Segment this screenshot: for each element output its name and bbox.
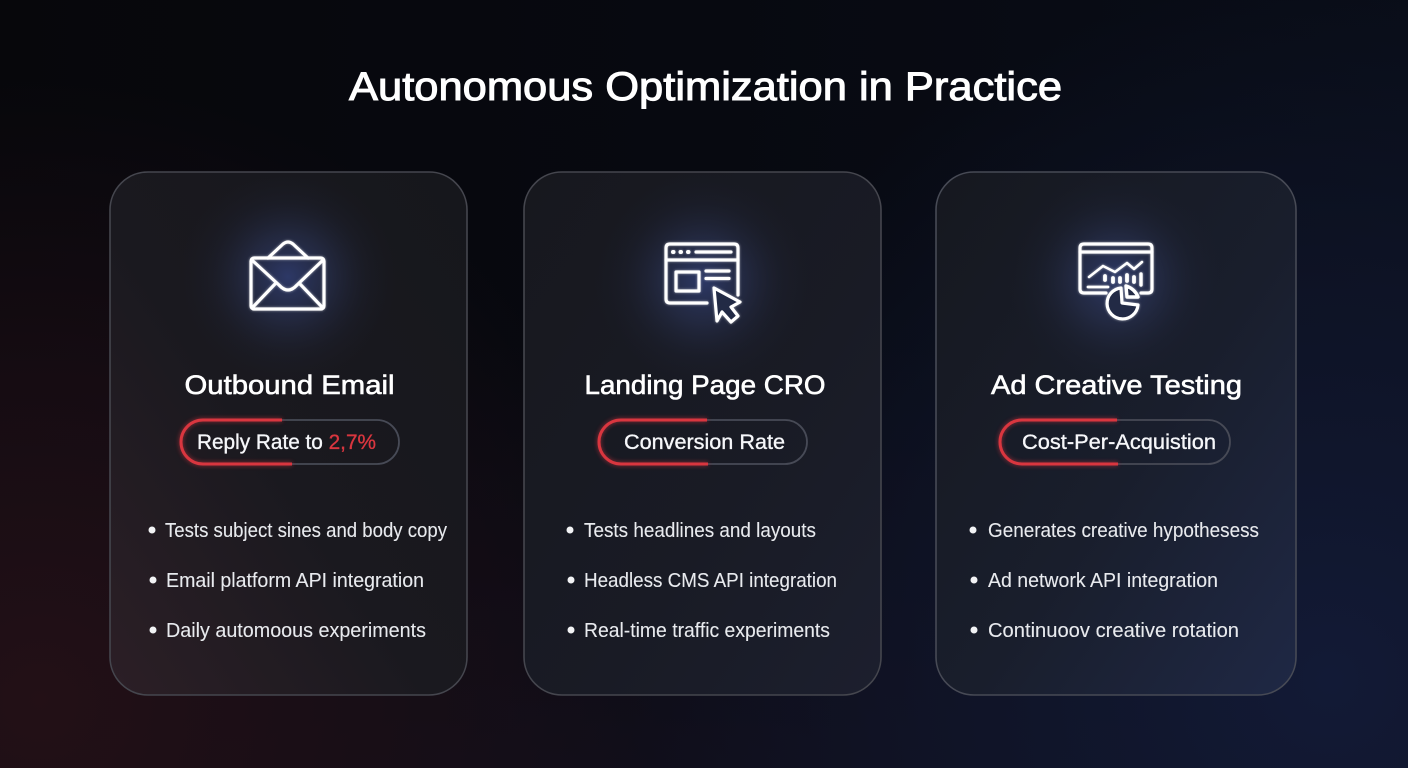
panel: ad creative testing (936, 172, 1296, 695)
metric pill: cost-per-acquistion: Cost-Per-Acquistion (1022, 430, 1216, 454)
panel: landing page cro (524, 172, 881, 695)
bullet list: ad creative testing: Continuoov creative rotation (988, 620, 1239, 642)
metric pill: reply rate (181, 420, 399, 464)
bullet list: outbound email (148, 520, 447, 642)
icon: analytics dashboard with pie chart (1008, 172, 1224, 388)
bullet list: landing page cro (566, 520, 837, 642)
bullet list: landing page cro: Real-time traffic experiments (584, 620, 830, 642)
icon: envelope (180, 169, 396, 385)
panel: outbound email (110, 169, 467, 695)
heading: outbound email: Outbound Email (184, 370, 394, 400)
bullet list: outbound email: Daily automoous experiments (166, 620, 426, 642)
heading: landing page cro: Landing Page CRO (584, 370, 826, 400)
metric pill: reply rate: Reply Rate to 2,7% (197, 430, 376, 454)
bullet list: ad creative testing: Ad network API integration (988, 570, 1218, 592)
metric pill: conversion rate (599, 420, 807, 464)
bullet list: landing page cro: Headless CMS API integration (584, 570, 837, 592)
metric pill: conversion rate: Conversion Rate (624, 430, 785, 454)
icon: browser with cursor (595, 172, 811, 388)
bullet list: landing page cro: Tests headlines and layouts (584, 520, 816, 542)
bullet list: outbound email: Email platform API integration (166, 570, 424, 592)
metric pill: cost-per-acquistion (1000, 420, 1230, 464)
title: Autonomous Optimization in Practice (349, 65, 1062, 109)
bullet list: ad creative testing (970, 520, 1259, 642)
bullet list: outbound email: Tests subject sines and body copy (165, 520, 447, 542)
bullet list: ad creative testing: Generates creative hypothesess (988, 520, 1259, 542)
heading: ad creative testing: Ad Creative Testing (991, 370, 1242, 400)
